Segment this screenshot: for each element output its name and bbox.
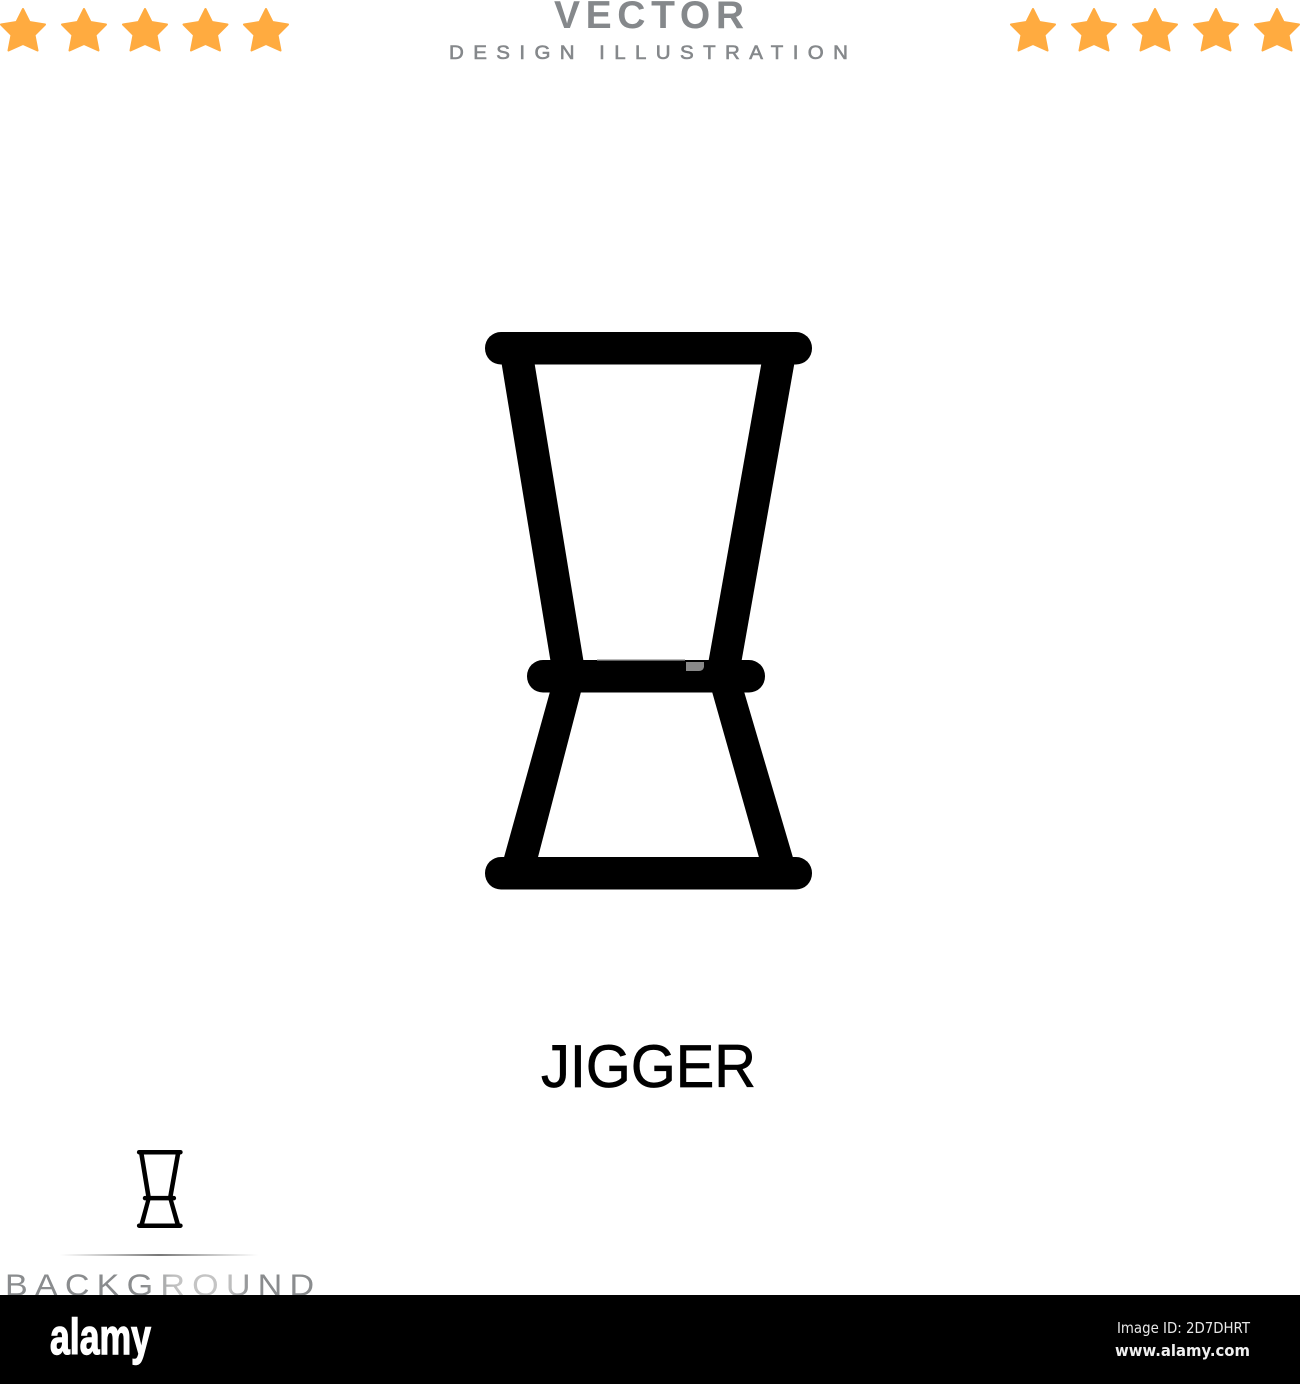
logo: alamy: alamy (50, 1309, 151, 1365)
icon: small jigger (137, 1150, 183, 1228)
website: www.alamy.com (1115, 1341, 1250, 1360)
icon: large jigger (485, 332, 812, 890)
subheading: DESIGN ILLUSTRATION: DESIGN ILLUSTRATION (449, 43, 848, 64)
left rating stars (1, 9, 288, 50)
image id: Image ID: 2D7DHRT (1117, 1319, 1251, 1337)
label: BACKGROUND: BACKGROUND (5, 1268, 314, 1302)
right rating stars (1011, 9, 1299, 50)
divider line (60, 1254, 258, 1256)
title: JIGGER: JIGGER (541, 1033, 756, 1100)
footer bar (0, 1295, 1300, 1384)
